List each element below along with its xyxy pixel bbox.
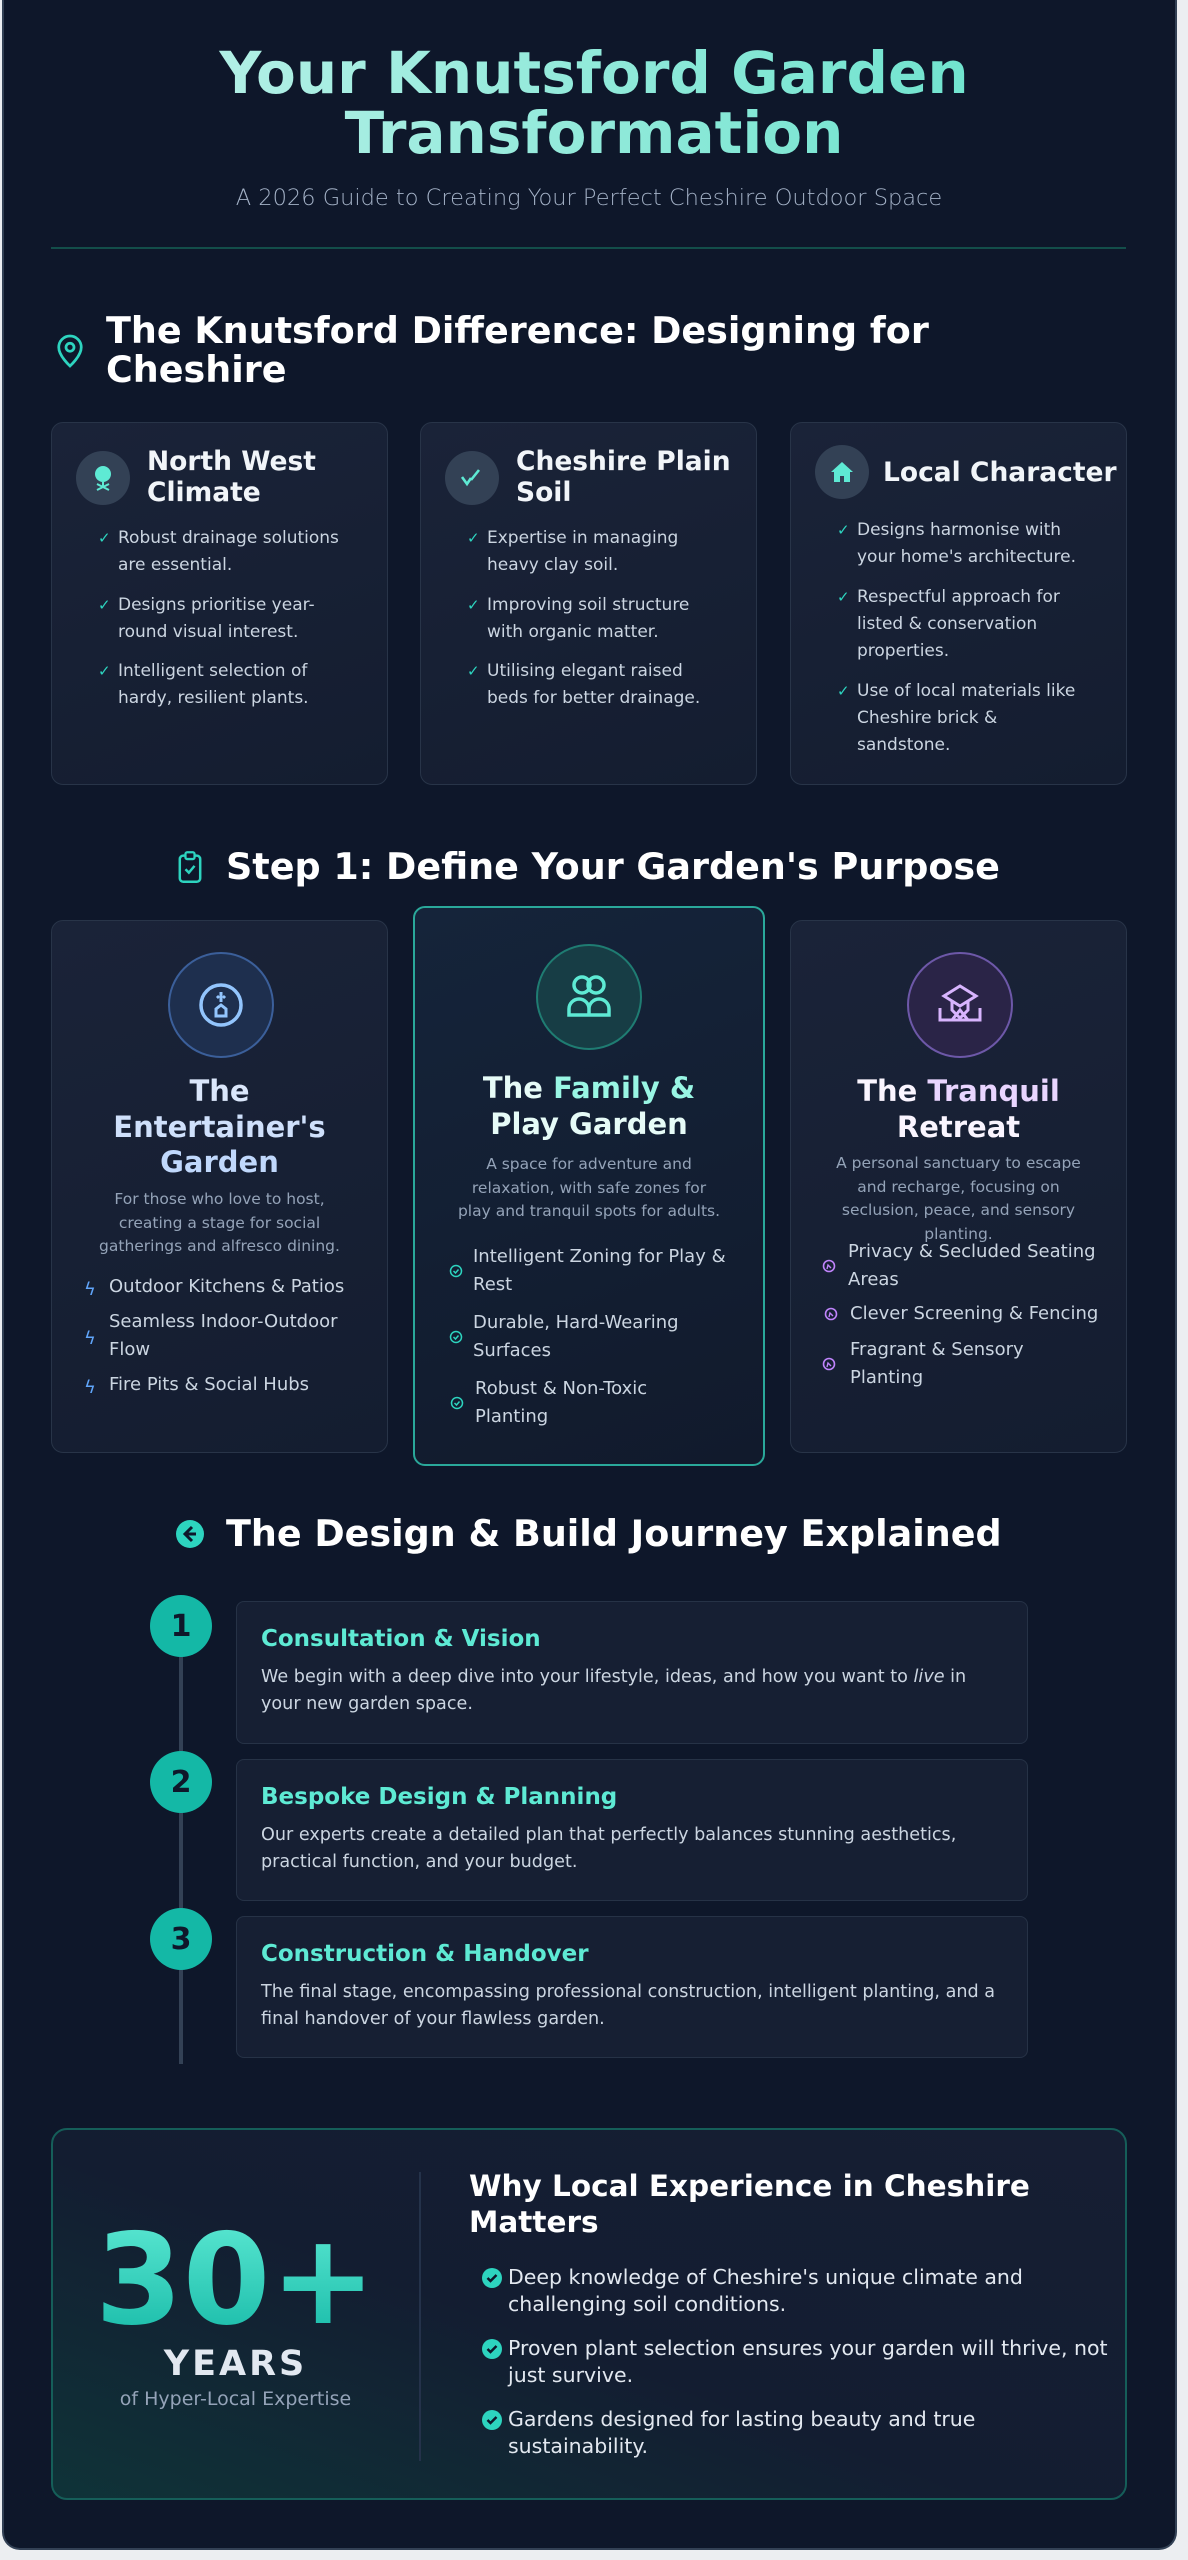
panel: Local Character: Use of local materials like Cheshire brick & sandstone. (857, 681, 1075, 755)
panel: Cheshire Plain Soil (420, 422, 757, 785)
description: A space for adventure and (486, 1155, 692, 1173)
description: and recharge, focusing on (857, 1178, 1060, 1196)
card title: Entertainer's (113, 1110, 326, 1144)
list: Deep knowledge of Cheshire's unique climate and challenging soil conditions. (508, 2265, 1023, 2316)
panel: Local Character: Respectful approach for listed & conservation properties. (857, 587, 1060, 661)
panel: Cheshire Plain Soil: ✓ (467, 662, 480, 680)
panel: Entertainer's Garden (51, 920, 388, 1453)
step 3: The final stage, encompassing professional construction, intelligent planting, and a final handover of your flawless garden. (261, 1982, 995, 2029)
card title: The Tranquil (857, 1074, 1060, 1108)
panel: Cheshire Plain Soil: ✓ (467, 529, 480, 547)
panel: Local Character (790, 422, 1127, 785)
bullets: Robust drainage solutions are essential. (118, 528, 339, 575)
panel: Cheshire Plain Soil: Utilising elegant raised beds for better drainage. (487, 661, 700, 708)
card title: Retreat (897, 1110, 1020, 1144)
features: Outdoor Kitchens & Patios (109, 1276, 344, 1297)
step 1: 1 (171, 1608, 191, 1644)
description: creating a stage for social (119, 1214, 320, 1232)
panel: Tranquil Retreat: Clever Screening & Fencing (850, 1303, 1098, 1324)
panel: Family & Play Garden (413, 906, 765, 1466)
stat: 30+ years: of Hyper-Local Expertise (120, 2388, 351, 2410)
panel: North West Climate: Intelligent selection of hardy, resilient plants. (118, 661, 309, 708)
description: planting. (924, 1224, 993, 1242)
title: Transformation (345, 99, 843, 167)
step 1 (150, 1595, 1028, 1744)
card title: Soil (516, 477, 571, 508)
panel: Local Character: ✓ (837, 521, 850, 539)
panel: Tranquil Retreat (790, 920, 1127, 1453)
card title: Garden (160, 1145, 279, 1179)
card title (857, 1074, 1060, 1144)
heading: Knutsford difference: The Knutsford Difference: Designing for (106, 309, 929, 352)
panel: North West Climate: Designs prioritise year-round visual interest. (118, 595, 315, 642)
panel: North West Climate: ✓ (98, 529, 111, 547)
icon: soil (445, 451, 499, 505)
panel: Tranquil Retreat: Fragrant & Sensory Planting (850, 1339, 1024, 1388)
description (458, 1155, 720, 1220)
panel: Family & Play Garden: Robust & Non-Toxic Planting (475, 1378, 647, 1427)
panel: Cheshire Plain Soil: Improving soil structure with organic matter. (487, 595, 689, 642)
list (482, 2265, 1108, 2458)
description: gatherings and alfresco dining. (99, 1237, 340, 1255)
heading: Knutsford difference: Cheshire (106, 348, 287, 391)
card title: North West (147, 446, 316, 477)
card title (516, 446, 731, 508)
icon: arrow circle (176, 1520, 204, 1548)
features: Intelligent Zoning for Play & Rest (473, 1246, 726, 1295)
heading: Step 1: Step 1: Define Your Garden's Purpose (226, 845, 1000, 888)
panel: Entertainer's Garden: ϟ (84, 1377, 96, 1398)
panel: Entertainer's Garden: ϟ (84, 1328, 96, 1349)
card title (147, 446, 316, 508)
card title (483, 1071, 695, 1141)
bullets: Expertise in managing heavy clay soil. (487, 528, 678, 575)
step 1: We begin with a deep dive into your lifestyle, ideas, and how you want to live in your new garden space. (261, 1667, 966, 1714)
card title (113, 1074, 326, 1179)
panel: local experience (51, 2128, 1127, 2500)
panel: Entertainer's Garden: ϟ (84, 1279, 96, 1300)
description: For those who love to host, (114, 1190, 325, 1208)
stat: 30+ years: 30+ (95, 2206, 376, 2353)
heading: Knutsford difference (106, 309, 929, 391)
icon: house (815, 445, 869, 499)
panel: North West Climate: ✓ (98, 662, 111, 680)
step 1: Consultation & Vision (261, 1626, 541, 1652)
step 2 (150, 1751, 1028, 1901)
step 3: 3 (171, 1922, 191, 1956)
description: play and tranquil spots for adults. (458, 1202, 720, 1220)
subtitle: A 2026 Guide to Creating Your Perfect Cheshire Outdoor Space (236, 185, 942, 211)
panel: Cheshire Plain Soil: ✓ (467, 596, 480, 614)
icon: retreat (907, 952, 1013, 1058)
features: Privacy & Secluded Seating Areas (848, 1241, 1096, 1290)
description (836, 1154, 1081, 1242)
description: relaxation, with safe zones for (472, 1178, 706, 1196)
card title: Play Garden (490, 1107, 688, 1141)
title: Your Knutsford Garden (219, 39, 969, 107)
card title: The (189, 1074, 250, 1108)
card title: Local Character (883, 457, 1117, 488)
panel: North West Climate: ✓ (98, 596, 111, 614)
heading: why local (469, 2169, 1030, 2239)
card title: The Family & (483, 1071, 695, 1105)
step 2: Our experts create a detailed plan that perfectly balances stunning aesthetics, practical function, and your budget. (261, 1825, 956, 1872)
description (99, 1190, 340, 1255)
card title: Cheshire Plain (516, 446, 731, 477)
heading: why local: Why Local Experience in Cheshire (469, 2169, 1030, 2203)
panel: Entertainer's Garden: Seamless Indoor-Outdoor Flow (109, 1311, 338, 1360)
icon: family (536, 944, 642, 1050)
list: Gardens designed for lasting beauty and true sustainability. (508, 2407, 975, 2458)
icon: location pin (57, 334, 83, 368)
bullets: Designs harmonise with your home's architecture. (857, 520, 1076, 567)
description: seclusion, peace, and sensory (842, 1201, 1075, 1219)
step 3: Construction & Handover (261, 1941, 589, 1967)
heading: why local: Matters (469, 2205, 599, 2239)
description: A personal sanctuary to escape (836, 1154, 1081, 1172)
panel: Local Character: ✓ (837, 588, 850, 606)
step 2: Bespoke Design & Planning (261, 1784, 617, 1810)
panel: Entertainer's Garden: Fire Pits & Social Hubs (109, 1374, 309, 1395)
timeline line (179, 1650, 183, 2064)
list: Proven plant selection ensures your garden will thrive, not just survive. (508, 2336, 1108, 2387)
heading: journey: The Design & Build Journey Explained (226, 1512, 1002, 1555)
card title: Climate (147, 477, 261, 508)
step 2: 2 (171, 1764, 191, 1800)
title (0, 43, 1188, 163)
panel: North West Climate (51, 422, 388, 785)
icon: clipboard (178, 851, 202, 883)
panel: Family & Play Garden: Durable, Hard-Wearing Surfaces (473, 1312, 679, 1361)
icon: entertainer (168, 952, 274, 1058)
icon: climate (76, 451, 130, 505)
stat: 30+ years: YEARS (164, 2344, 307, 2384)
panel: Local Character: ✓ (837, 682, 850, 700)
step 3 (150, 1908, 1028, 2058)
